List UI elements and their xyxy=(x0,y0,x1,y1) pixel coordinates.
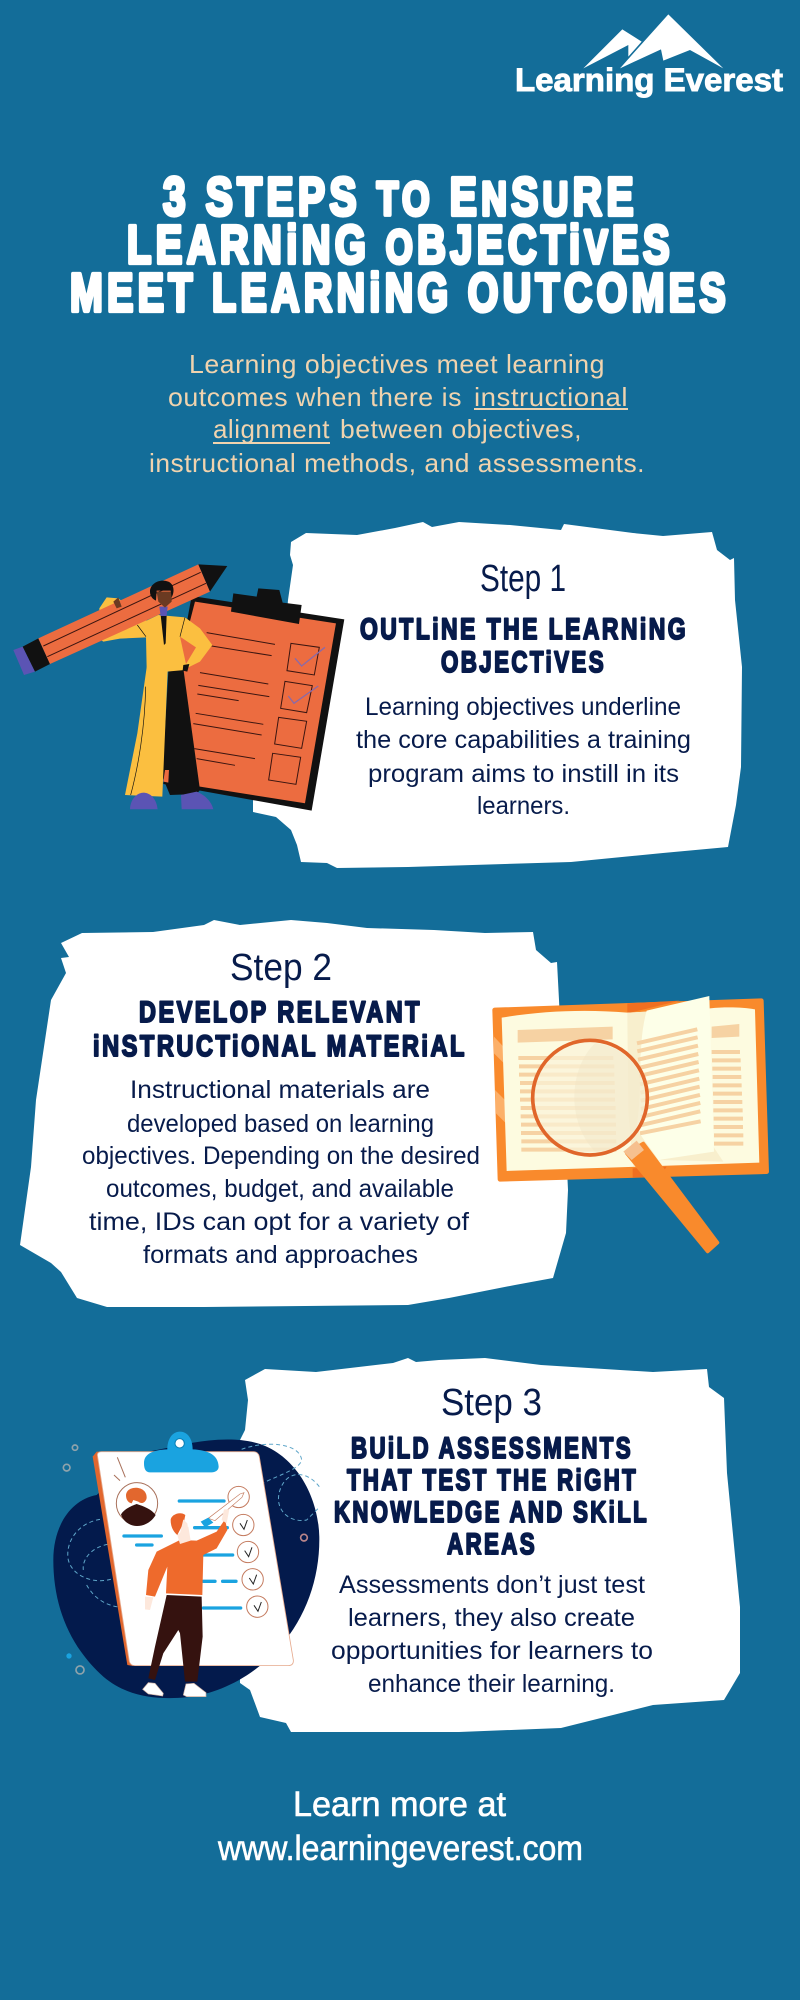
step 1 body text: program aims to instill in its xyxy=(368,760,679,788)
step 2 body text: formats and approaches xyxy=(143,1241,418,1269)
step 1 body text: the core capabilities a training xyxy=(356,726,691,754)
panel: step 3 xyxy=(240,1358,740,1732)
intro paragraph: Learning objectives meet learning xyxy=(189,349,605,379)
small dots xyxy=(63,1445,307,1674)
step 3 heading: KNOWLEDGE AND SKiLL xyxy=(334,1496,649,1529)
pencil xyxy=(13,564,227,675)
clipboard xyxy=(163,588,344,811)
step 1 heading xyxy=(360,613,688,679)
title: 3 STEPS TO ENSURE xyxy=(163,167,638,227)
illustration: person ticking checklist on clipboard xyxy=(53,1432,320,1698)
step 1 body text: Learning objectives underline xyxy=(365,693,681,721)
magnifying glass xyxy=(533,1040,718,1252)
book text stripes xyxy=(518,1024,743,1152)
intro paragraph: instructional methods, and assessments. xyxy=(149,448,645,478)
book xyxy=(494,1001,767,1179)
step 3 heading: BUiLD ASSESSMENTS xyxy=(351,1432,633,1465)
intro paragraph: outcomes when there is xyxy=(168,382,462,412)
logo: Learning Everest xyxy=(515,14,783,98)
step 1 body text xyxy=(356,693,691,820)
navy blob xyxy=(53,1440,319,1698)
step 1 heading: OUTLiNE THE LEARNiNG xyxy=(360,613,688,646)
title: LEARNiNG OBJECTiVES xyxy=(127,215,674,275)
step 1 body text: learners. xyxy=(477,792,570,820)
step 1 heading: OBJECTiVES xyxy=(441,646,606,679)
step 2 body text: objectives. Depending on the desired xyxy=(82,1142,480,1170)
step 2 label: Step 2 xyxy=(230,947,332,989)
step 2 body text: time, IDs can opt for a variety of xyxy=(89,1208,469,1236)
footer call to action xyxy=(217,1785,583,1868)
step 3 heading: THAT TEST THE RiGHT xyxy=(347,1464,638,1497)
flipped page xyxy=(637,996,714,1160)
step 3 body text xyxy=(331,1571,653,1698)
title xyxy=(70,167,730,323)
step 3 heading xyxy=(334,1432,649,1561)
step 2 heading: iNSTRUCTiONAL MATERiAL xyxy=(93,1030,467,1063)
intro paragraph: between objectives, xyxy=(340,414,582,444)
illustration: open book with magnifying glass xyxy=(494,996,767,1252)
clipboard sheet xyxy=(93,1432,293,1666)
step 3 body text: opportunities for learners to xyxy=(331,1637,653,1665)
footer call to action: www.learningeverest.com xyxy=(217,1829,583,1868)
intro paragraph: alignment xyxy=(213,414,330,444)
step 3 body text: Assessments don’t just test xyxy=(339,1571,645,1599)
step 2 body text xyxy=(82,1076,480,1269)
person xyxy=(125,581,213,809)
illustration: person with giant pencil and checklist clipboard xyxy=(13,564,344,811)
step 3 body text: enhance their learning. xyxy=(368,1670,615,1698)
step 1 label: Step 1 xyxy=(480,558,566,600)
logo: Learning Everest: Learning Everest xyxy=(515,62,783,98)
dashed decorations xyxy=(68,1444,320,1608)
person xyxy=(143,1493,244,1697)
step 2 body text: developed based on learning xyxy=(127,1110,434,1138)
step 2 heading: DEVELOP RELEVANT xyxy=(139,996,422,1029)
step 3 heading: AREAS xyxy=(447,1528,537,1561)
step 3 body text: learners, they also create xyxy=(348,1604,635,1632)
person back sleeve xyxy=(99,597,150,642)
step 2 heading xyxy=(93,996,467,1063)
footer call to action: Learn more at xyxy=(293,1785,506,1824)
step 3 label: Step 3 xyxy=(441,1382,542,1424)
panel: step 2 xyxy=(20,920,568,1307)
intro paragraph xyxy=(149,349,645,478)
panel: step 1 xyxy=(253,522,742,868)
intro paragraph: instructional xyxy=(474,382,628,412)
step 2 body text: Instructional materials are xyxy=(130,1076,430,1104)
step 2 body text: outcomes, budget, and available xyxy=(106,1175,454,1203)
